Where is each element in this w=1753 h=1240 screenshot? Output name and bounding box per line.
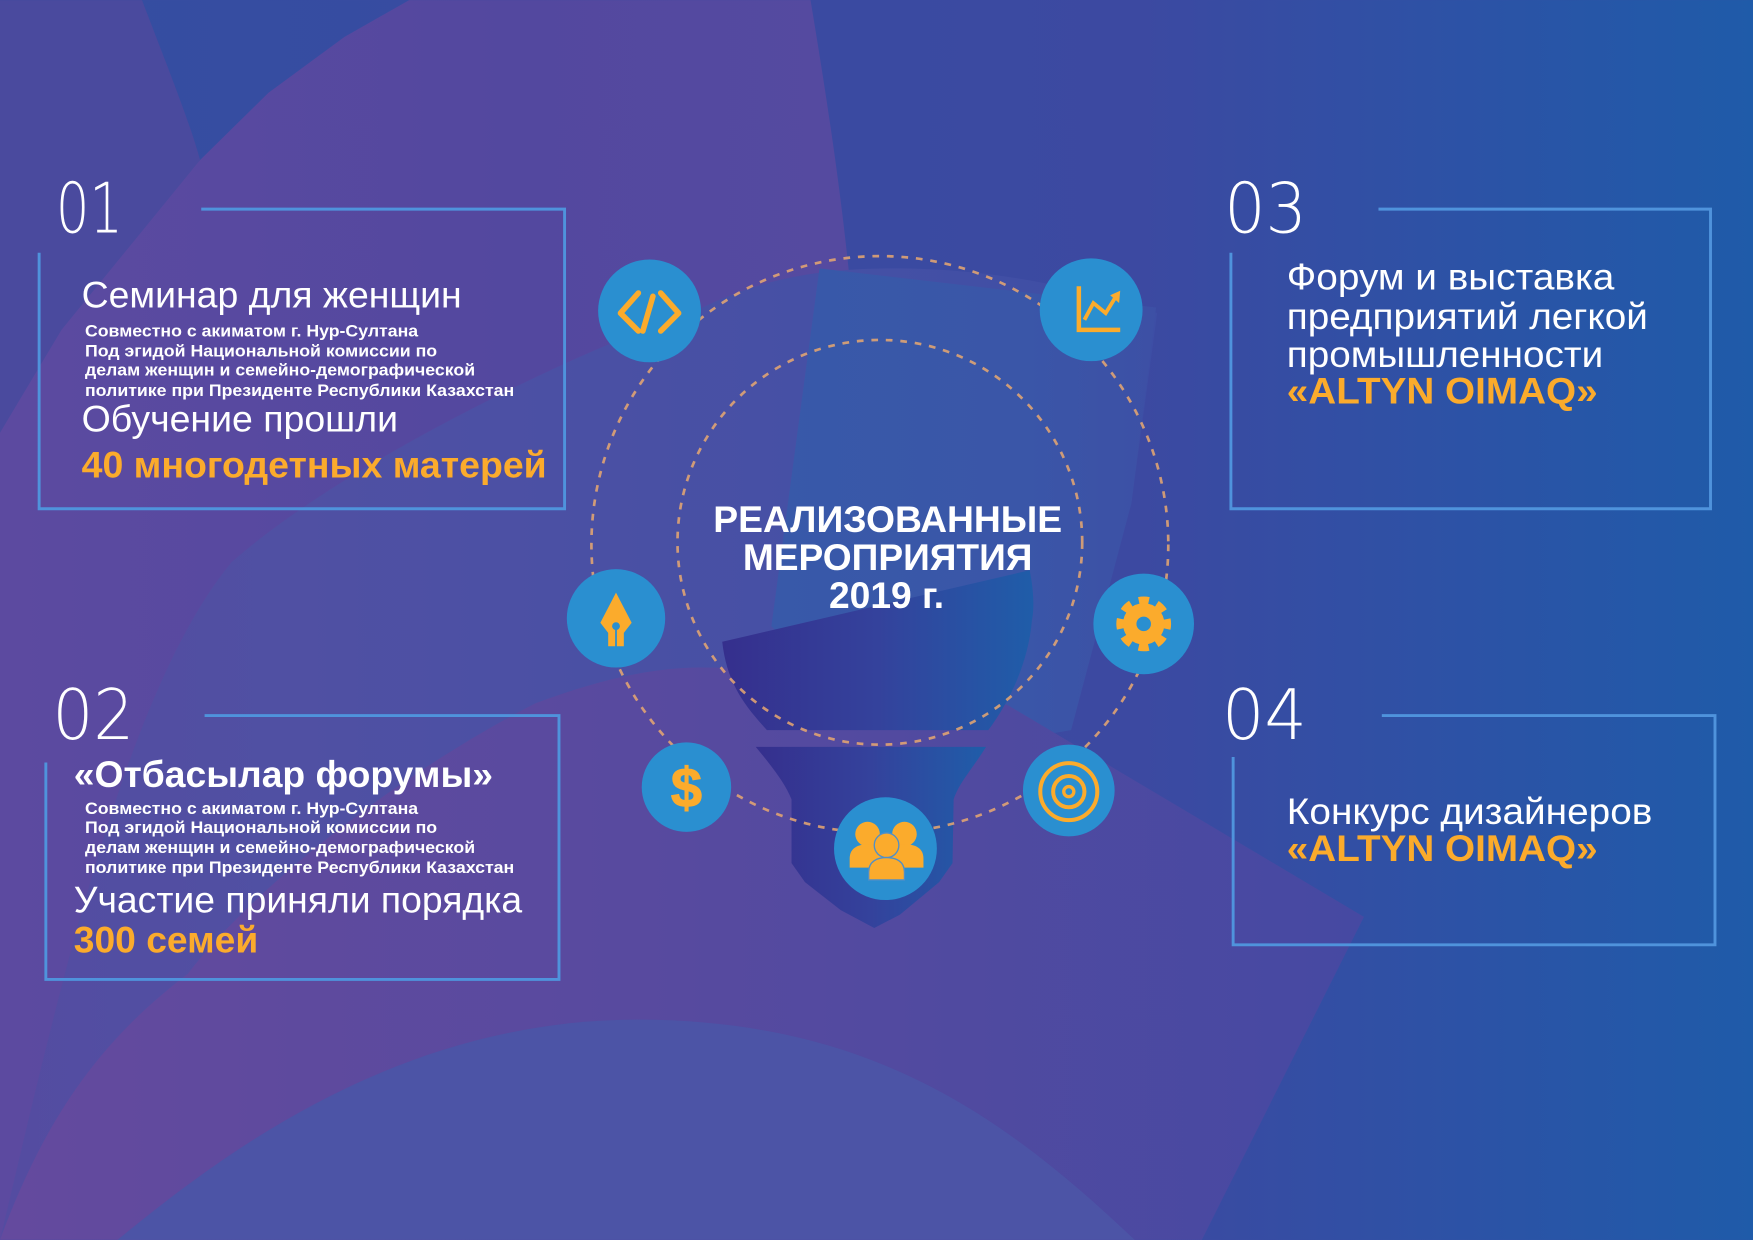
text 04 — [1287, 791, 1652, 869]
text 04: «ALTYN OIMAQ» — [1287, 828, 1598, 869]
icon: pen nib — [567, 569, 665, 668]
frame 01 — [39, 209, 565, 509]
frame 03 — [1231, 209, 1711, 509]
icon: dollar: $ — [671, 756, 702, 819]
description 01 — [85, 323, 514, 400]
icon: growth chart — [1040, 258, 1143, 361]
text 03: предприятий легкой — [1287, 296, 1648, 337]
dashed circle: inner — [677, 340, 1082, 745]
result 02: Участие приняли порядка — [74, 879, 523, 920]
central title — [713, 499, 1062, 616]
description 02 — [85, 800, 514, 877]
description 01: Совместно с акиматом г. Нур-Султана — [85, 323, 419, 341]
icon: dollar — [642, 742, 731, 832]
panel 03: light industry forum — [1224, 170, 1711, 509]
heading 02: «Отбасылар форумы» — [74, 754, 493, 795]
description 01: политике при Президенте Республики Казахстан — [85, 382, 514, 400]
result 01 — [82, 399, 547, 485]
description 02: политике при Президенте Республики Казахстан — [85, 859, 514, 877]
text 03: «ALTYN OIMAQ» — [1287, 371, 1598, 412]
number 04: 04 — [1222, 676, 1307, 756]
text 03: промышленности — [1287, 334, 1603, 375]
panel 02: family forum — [46, 676, 559, 979]
text 04: Конкурс дизайнеров — [1287, 791, 1652, 832]
number 01: 01 — [56, 170, 123, 250]
icon: people — [834, 797, 937, 900]
description 02: Под эгидой Национальной комиссии по — [85, 819, 437, 837]
icon: code — [598, 259, 701, 362]
text 03 — [1287, 257, 1648, 412]
number 02: 02 — [53, 676, 134, 756]
description 02: Совместно с акиматом г. Нур-Султана — [85, 800, 419, 818]
panel 01: seminar for women — [39, 170, 565, 509]
heading 01: Семинар для женщин — [82, 275, 462, 316]
central title: РЕАЛИЗОВАННЫЕ — [713, 499, 1062, 540]
icon: gear — [1093, 574, 1194, 674]
lightbulb — [722, 570, 1033, 928]
dashed circle: outer — [591, 256, 1168, 833]
text 03: Форум и выставка — [1287, 257, 1615, 298]
panel 04: designers contest — [1222, 676, 1715, 945]
number 03: 03 — [1224, 170, 1307, 250]
description 01: делам женщин и семейно-демографической — [85, 362, 475, 380]
description 01: Под эгидой Национальной комиссии по — [85, 343, 437, 361]
frame 02 — [46, 716, 559, 979]
result 01: 40 многодетных матерей — [82, 444, 547, 485]
result 01: Обучение прошли — [82, 399, 398, 440]
result 02: 300 семей — [74, 920, 258, 961]
icon: target — [1023, 745, 1115, 836]
result 02 — [74, 879, 523, 961]
frame 04 — [1233, 716, 1715, 945]
central title: 2019 г. — [829, 575, 944, 616]
description 02: делам женщин и семейно-демографической — [85, 839, 475, 857]
central title: МЕРОПРИЯТИЯ — [743, 537, 1032, 578]
